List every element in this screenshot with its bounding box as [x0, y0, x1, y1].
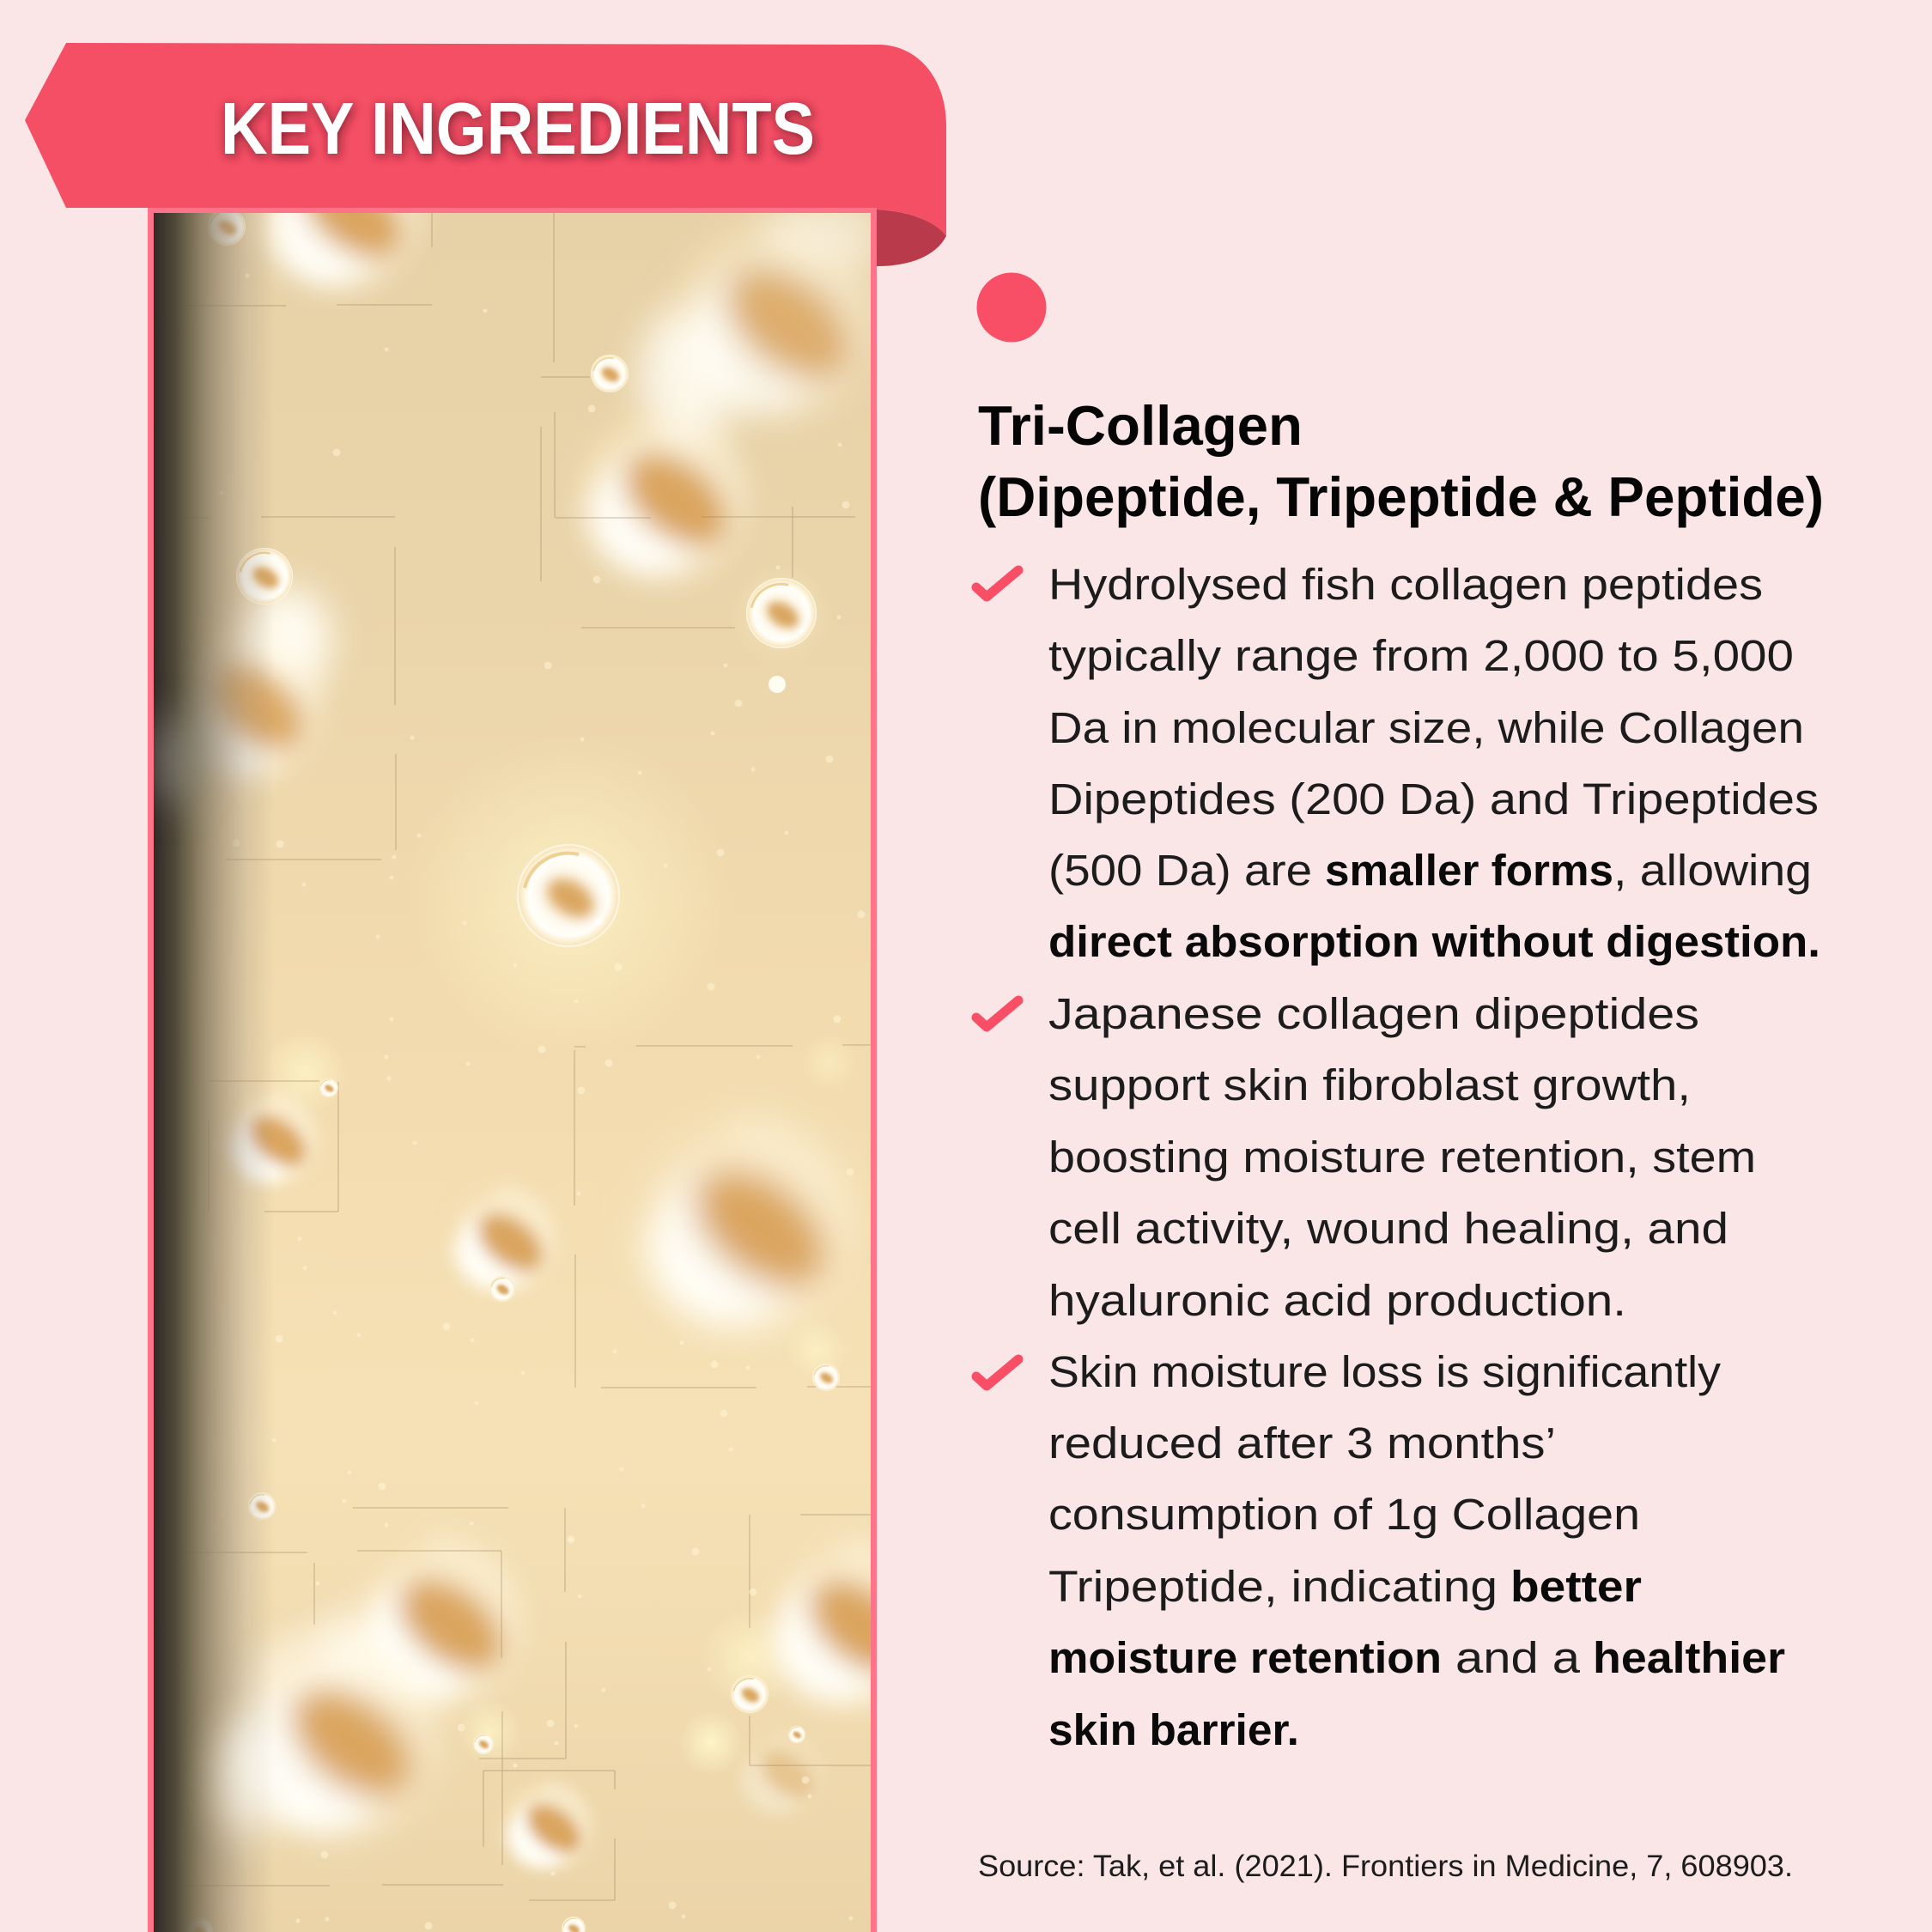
- photo frame: [148, 207, 877, 1932]
- white out-of-focus patches: [245, 202, 884, 1812]
- pale highlights over the dark edge: [154, 713, 279, 1838]
- bullet 1 text: , allowing: [1613, 846, 1812, 895]
- source citation: Source: Tak, et al. (2021). Frontiers in Medicine, 7, 608903.: [978, 1850, 1793, 1883]
- heading: (Dipeptide, Tripeptide & Peptide): [978, 465, 1824, 528]
- bullet 2 text: support skin fibroblast growth,: [1048, 1060, 1691, 1109]
- bullet 1 text: typically range from 2,000 to 5,000: [1048, 631, 1794, 680]
- dark left edge shadow: [154, 213, 275, 1932]
- bullet 1 text: smaller forms: [1325, 846, 1613, 895]
- heading: [978, 394, 1824, 528]
- bullet 2 text: Japanese collagen dipeptides: [1048, 989, 1699, 1038]
- bullet 1 text: Da in molecular size, while Collagen: [1048, 703, 1804, 752]
- bullet 1 text: direct absorption without digestion.: [1048, 917, 1820, 966]
- bullet 2: [976, 989, 1756, 1325]
- ribbon banner: [25, 43, 946, 236]
- heading: Tri-Collagen: [978, 394, 1303, 457]
- small droplets: [222, 276, 851, 1921]
- banner title: KEY INGREDIENTS: [221, 88, 815, 170]
- bullet 1: [976, 560, 1820, 966]
- bullet 3 text: [1048, 1347, 1785, 1754]
- ribbon fold: [877, 210, 946, 266]
- bullet 2 text: hyaluronic acid production.: [1048, 1276, 1626, 1325]
- bullet 3 text: skin barrier.: [1048, 1705, 1299, 1754]
- bullet 3 text: moisture retention: [1048, 1633, 1442, 1682]
- bullet 3 text: better: [1510, 1562, 1642, 1611]
- bullet 3 text: Tripeptide, indicating: [1048, 1562, 1498, 1611]
- soft glows: [280, 794, 839, 1765]
- bullet 3 text: consumption of 1g Collagen: [1048, 1490, 1640, 1539]
- bullet 1 text: [1048, 560, 1820, 966]
- check icon: [976, 570, 1018, 597]
- bullet 1 text: (500 Da) are: [1048, 846, 1312, 895]
- check icon: [976, 1000, 1018, 1027]
- bullet 1 text: Hydrolysed fish collagen peptides: [1048, 560, 1763, 609]
- bullet 3: [976, 1347, 1785, 1754]
- check icon: [976, 1359, 1018, 1386]
- sharp bubbles: [185, 208, 840, 1932]
- bullet 2 text: cell activity, wound healing, and: [1048, 1204, 1728, 1253]
- bullet 2 text: boosting moisture retention, stem: [1048, 1133, 1756, 1182]
- photo: collagen bubbles: [154, 213, 871, 1932]
- bullet 3 text: reduced after 3 months’: [1048, 1419, 1556, 1467]
- out-of-focus bubbles: [196, 213, 871, 1877]
- larger droplets: [236, 409, 861, 1926]
- thin lines: [154, 213, 871, 1900]
- bullet 3 text: Skin moisture loss is significantly: [1048, 1347, 1722, 1396]
- bullet 3 text: and a: [1455, 1633, 1581, 1682]
- red dot marker: [977, 273, 1046, 342]
- bullet 1 text: Dipeptides (200 Da) and Tripeptides: [1048, 775, 1819, 823]
- bullet 3 text: healthier: [1593, 1633, 1785, 1682]
- bullet 2 text: [1048, 989, 1756, 1325]
